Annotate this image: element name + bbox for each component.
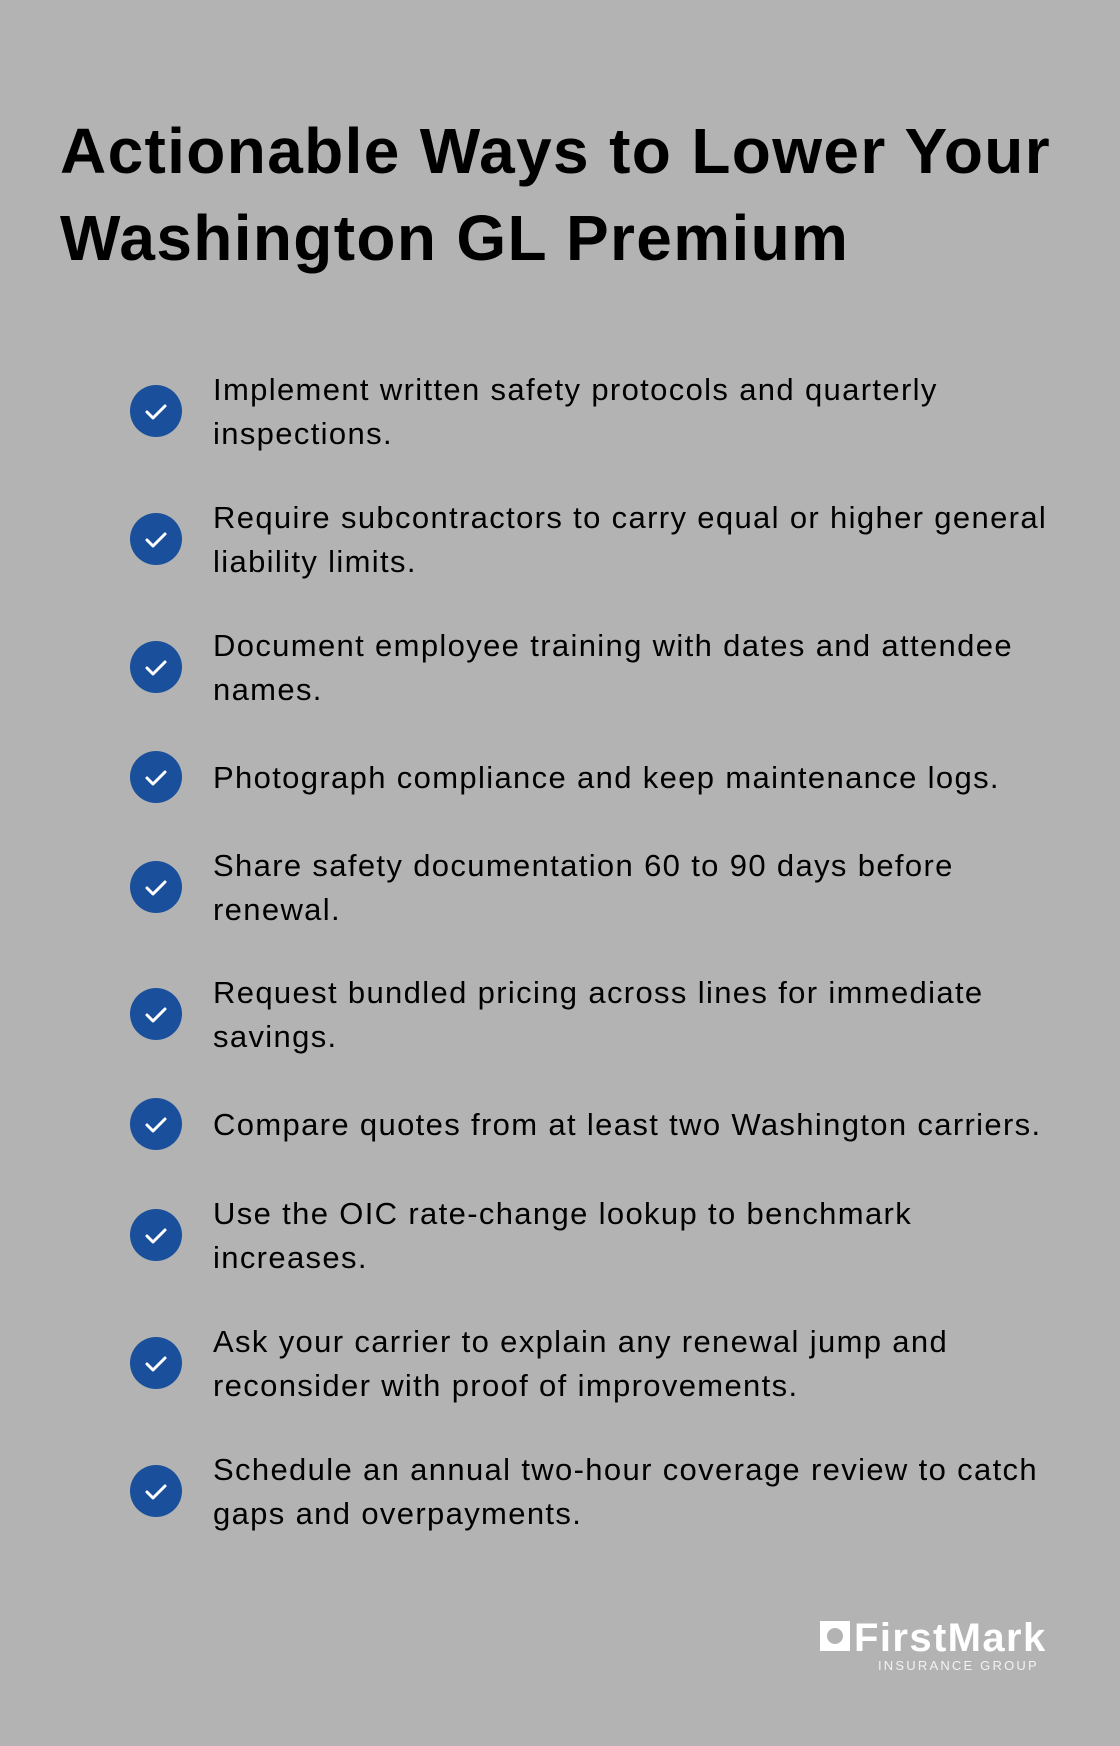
item 4: Photograph compliance and keep maintenance logs.: [213, 760, 1000, 794]
text: Ask your carrier to explain any renewal jump and: [213, 1324, 948, 1358]
text: Document employee training with dates and attendee: [213, 628, 1013, 662]
item 4: [130, 751, 1000, 803]
item 8: [130, 1196, 912, 1274]
title: [60, 115, 1051, 274]
text: savings.: [213, 1018, 338, 1054]
logo: [820, 1618, 1047, 1673]
text: renewal.: [213, 892, 341, 926]
text: Implement written safety protocols and quarterly: [213, 372, 938, 406]
text: gaps and overpayments.: [213, 1496, 582, 1530]
item 1: [130, 372, 938, 450]
text: inspections.: [213, 416, 393, 450]
text: Require subcontractors to carry equal or higher general: [213, 500, 1047, 534]
item 7: [130, 1098, 1042, 1150]
text: Request bundled pricing across lines for immediate: [213, 974, 984, 1010]
item 5: [130, 848, 954, 926]
item 7: Compare quotes from at least two Washington carriers.: [213, 1106, 1042, 1142]
title: Actionable Ways to Lower Your: [60, 115, 1051, 187]
item 2: [130, 500, 1047, 578]
text: Share safety documentation 60 to 90 days before: [213, 848, 954, 882]
text: Schedule an annual two-hour coverage review to catch: [213, 1452, 1038, 1486]
text: increases.: [213, 1240, 368, 1274]
item 3: [130, 628, 1013, 706]
item 6: [130, 974, 984, 1054]
text: names.: [213, 672, 323, 706]
text: liability limits.: [213, 544, 417, 578]
text: reconsider with proof of improvements.: [213, 1368, 798, 1402]
item 10: [130, 1452, 1038, 1530]
title: Washington GL Premium: [60, 202, 849, 274]
item 9: [130, 1324, 948, 1402]
text: Use the OIC rate-change lookup to benchmark: [213, 1196, 912, 1230]
logo: INSURANCE GROUP: [878, 1658, 1039, 1673]
